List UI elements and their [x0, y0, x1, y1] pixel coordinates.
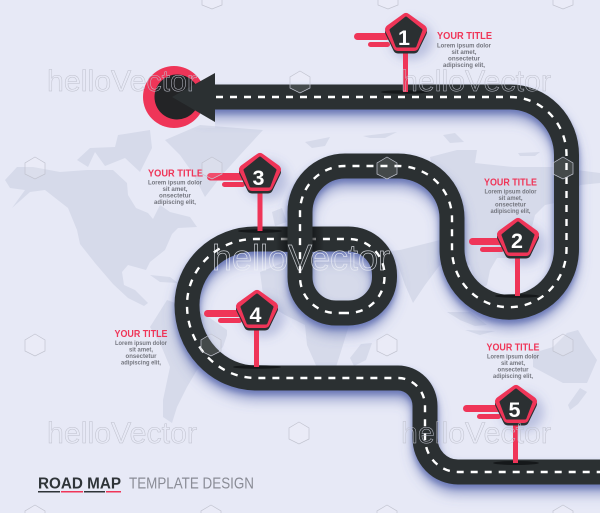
watermarks — [47, 65, 551, 450]
map: Indonesia — [447, 312, 495, 335]
map: Greenland — [165, 125, 263, 197]
pin 4 — [204, 295, 285, 369]
map: Caribbean — [150, 275, 178, 283]
arrow head — [172, 73, 215, 122]
text block 5 — [486, 342, 540, 380]
footer title: TEMPLATE DESIGN — [129, 475, 254, 492]
text block 5: sit amet, — [501, 360, 525, 367]
map: North America — [5, 167, 197, 306]
text block 4: sit amet, — [129, 346, 153, 354]
text block 3: adipiscing elit, — [154, 199, 196, 206]
map: Asia — [380, 150, 600, 303]
pin 5 — [463, 390, 544, 465]
road: lower section — [187, 239, 600, 472]
watermarks: helloVector — [401, 417, 551, 450]
text block 5: Lorem ipsum dolor — [487, 354, 539, 360]
pin 2 — [469, 223, 545, 298]
text block 1: YOUR TITLE — [437, 30, 492, 42]
pin 1: 1 — [398, 26, 410, 50]
road crossing shadow — [276, 227, 324, 252]
text block 2: sit amet, — [498, 195, 523, 202]
map: Africa and Arabia — [260, 262, 385, 370]
text block 4: YOUR TITLE — [114, 328, 168, 340]
text block 1: Lorem ipsum dolor — [437, 42, 491, 50]
pin 5: 5 — [509, 398, 521, 422]
footer title — [38, 475, 254, 492]
text block 3: Lorem ipsum dolor — [148, 180, 202, 186]
map: Russian islands — [305, 132, 540, 156]
text block 4: adipiscing elit, — [121, 360, 161, 366]
text block 3: onsectetur — [159, 192, 191, 200]
text block 4: Lorem ipsum dolor — [115, 340, 167, 347]
road shadow — [187, 101, 600, 482]
text block 3: sit amet, — [162, 186, 188, 193]
pin 3 — [207, 158, 288, 233]
map: Madagascar — [350, 343, 372, 366]
map: Australia — [533, 330, 597, 383]
text block 5: YOUR TITLE — [486, 342, 540, 354]
map: New Zealand — [568, 388, 587, 410]
world map — [5, 125, 600, 423]
map: South America — [150, 300, 227, 423]
text block 4: onsectetur — [126, 353, 157, 360]
text block 2: Lorem ipsum dolor — [484, 188, 537, 196]
text block 2: adipiscing elit, — [490, 208, 531, 215]
text block 4 — [114, 328, 168, 366]
text block 3: YOUR TITLE — [148, 168, 203, 180]
target circle — [143, 66, 205, 128]
pin 4: 4 — [250, 303, 262, 327]
watermarks: helloVector — [47, 65, 197, 98]
text block 1 — [437, 30, 492, 69]
watermarks: helloVector — [212, 237, 390, 278]
text block 5: onsectetur — [498, 366, 529, 374]
text block 1: onsectetur — [448, 56, 480, 62]
watermarks: helloVector — [47, 417, 197, 450]
text block 1: sit amet, — [452, 49, 477, 56]
text block 5: adipiscing elit, — [493, 373, 533, 380]
pin 3: 3 — [253, 166, 265, 190]
pin 2: 2 — [511, 229, 523, 253]
text block 2: YOUR TITLE — [484, 176, 537, 188]
footer title: ROAD MAP — [38, 475, 121, 492]
pin 1 — [354, 18, 433, 94]
text block 2 — [484, 176, 537, 215]
watermarks: helloVector — [401, 65, 551, 98]
road: upper section — [210, 97, 566, 313]
map: Arctic islands — [77, 130, 152, 172]
text block 3 — [148, 168, 203, 206]
map: British Isles — [272, 208, 287, 226]
text block 1: adipiscing elit, — [443, 62, 485, 69]
text block 2: onsectetur — [495, 202, 526, 208]
